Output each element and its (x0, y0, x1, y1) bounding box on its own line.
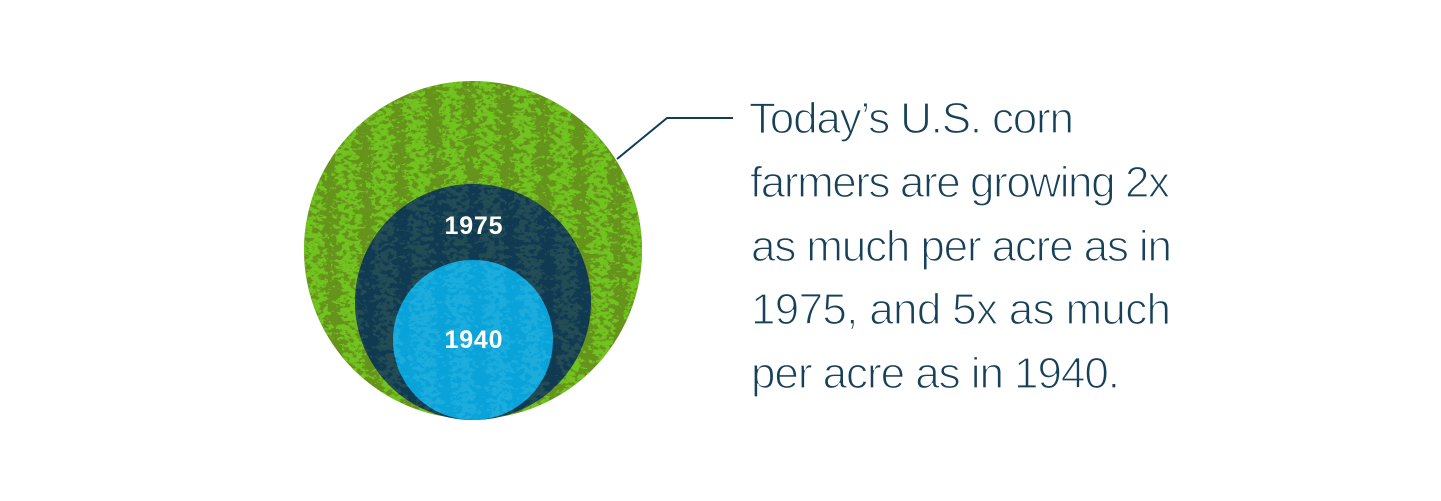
chart: nested yield circles (300, 70, 648, 430)
callout leader line (617, 118, 733, 159)
callout text: per acre as in 1940. (751, 349, 1120, 398)
callout text: 1975, and 5x as much (751, 285, 1171, 334)
callout text: farmers are growing 2x (750, 158, 1170, 207)
circle: 1975 yield (355, 184, 591, 420)
label: 1940: 1940 (444, 326, 502, 354)
circle: 1940 yield (393, 260, 553, 420)
callout text (749, 94, 1172, 398)
callout text: as much per acre as in (751, 222, 1172, 271)
circle: today's corn yield (300, 70, 648, 430)
callout text: Today’s U.S. corn (749, 94, 1074, 143)
label: 1975: 1975 (444, 212, 503, 240)
